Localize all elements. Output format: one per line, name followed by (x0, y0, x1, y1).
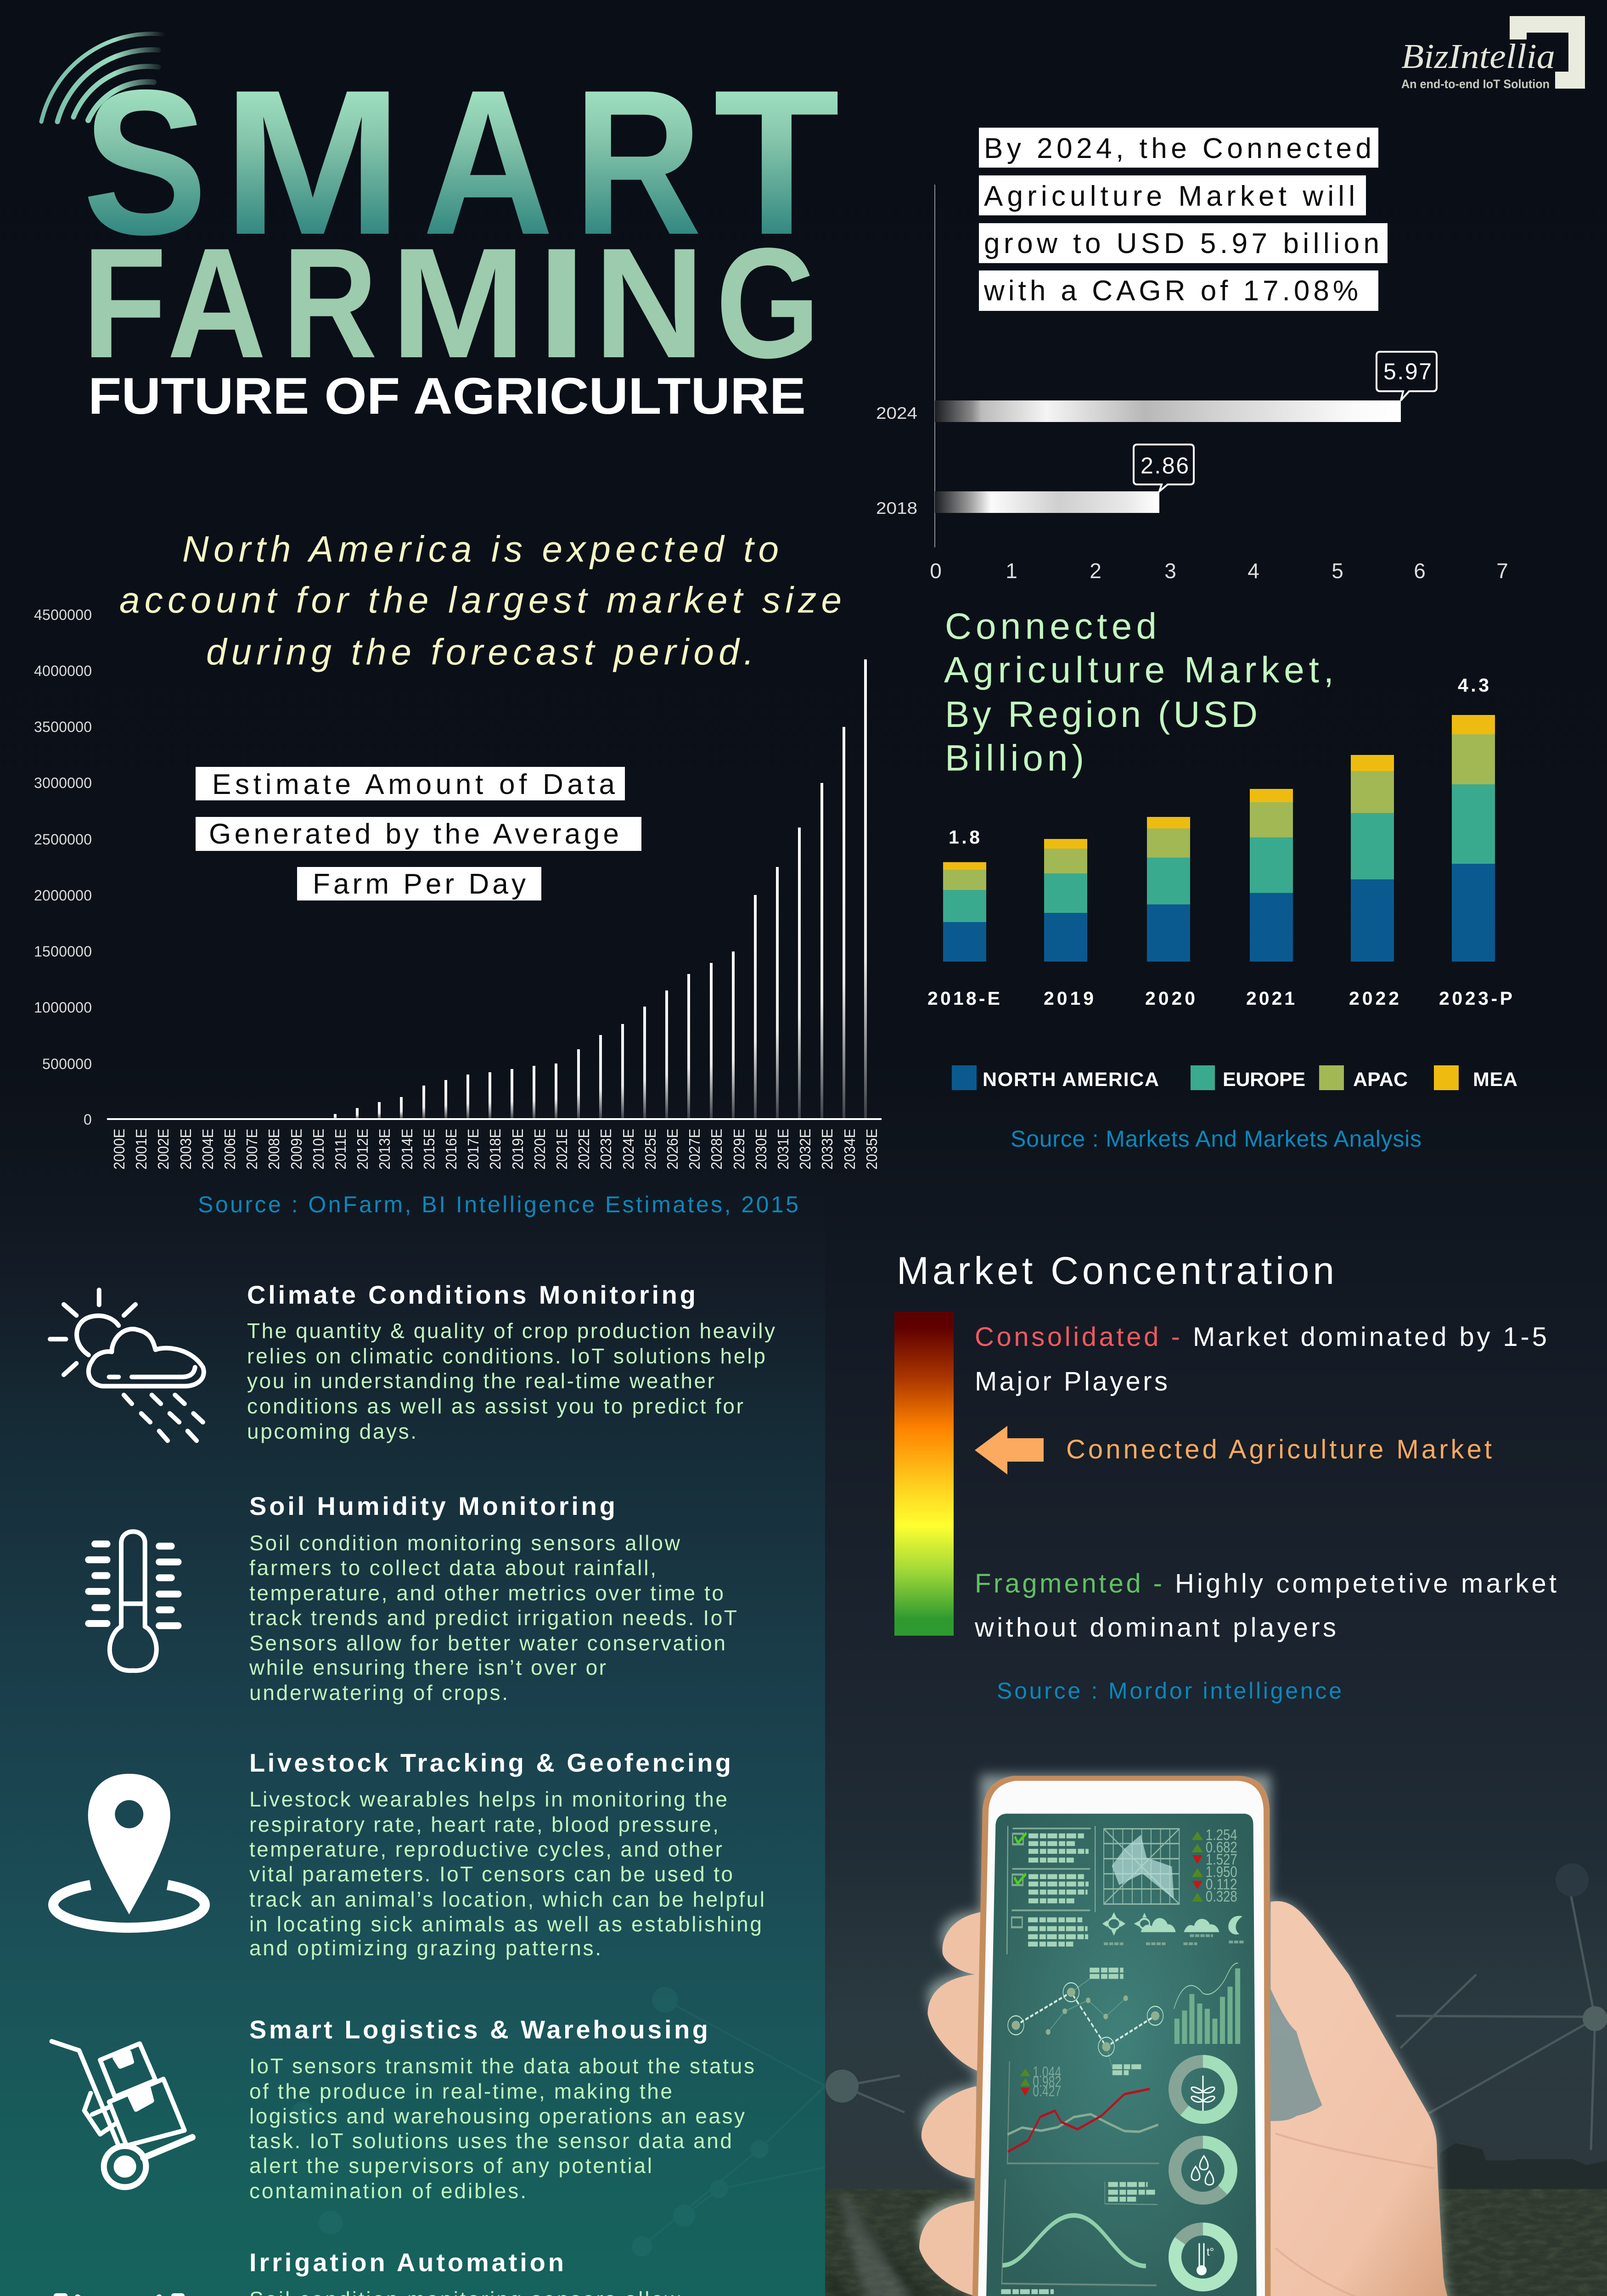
stack 2019 (1044, 839, 1087, 962)
text: soil humidity: underwatering of crops. (249, 1681, 508, 1705)
line chart: 0.982 (1033, 2073, 1061, 2090)
x axis ticks: 7 (1496, 559, 1508, 583)
text: irrigation automation: Irrigation Automation (249, 2248, 564, 2277)
bar chart: market growth (876, 185, 1508, 583)
x axis labels: 2004E (199, 1129, 216, 1170)
x axis labels (111, 1129, 880, 1170)
indicator values: 0.112 (1206, 1875, 1237, 1893)
text: soil humidity: Soil condition monitoring sensors allow (249, 1531, 680, 1555)
x axis ticks: 5 (1332, 559, 1343, 583)
x axis labels: 2029E (730, 1129, 747, 1170)
x axis labels: 2012E (354, 1129, 371, 1170)
x axis labels: 2007E (243, 1129, 260, 1170)
value 4.3: 4.3 (1458, 675, 1489, 696)
text: smart logistics: IoT sensors transmit the data about the status (249, 2054, 754, 2078)
hand glow (919, 1775, 1575, 2296)
x axis ticks: 3 (1164, 559, 1176, 583)
text: smart logistics: alert the supervisors of any potential (249, 2154, 652, 2178)
indicator values: 1.950 (1206, 1863, 1237, 1880)
x axis labels: 2033E (819, 1129, 836, 1170)
x axis labels: 2016E (443, 1129, 460, 1170)
horizon silhouettes (1439, 2143, 1607, 2189)
title: FARMING: M (390, 215, 526, 391)
text: soil humidity: while ensuring there isn’t over or (249, 1655, 606, 1679)
text: climate conditions: conditions as well as assist you to predict for (247, 1394, 743, 1418)
line chart (1007, 2061, 1159, 2163)
x axis labels: 2018E (487, 1129, 504, 1170)
x axis labels: 2035E (863, 1129, 880, 1170)
logo: BizIntellia: BizIntellia (1401, 37, 1555, 76)
mini bar chart (1174, 1963, 1240, 2044)
legend: APAC (1353, 1069, 1408, 1091)
bars (334, 659, 867, 1119)
title: SMART: A (422, 47, 554, 278)
checklist (1007, 1826, 1095, 1954)
logo: BizIntellia: An end-to-end IoT Solution (1401, 77, 1550, 91)
y axis labels: 500000 (42, 1056, 92, 1072)
x axis labels: 2022E (575, 1129, 592, 1170)
indicator values: 1.254 (1206, 1826, 1237, 1843)
x axis ticks: 4 (1247, 559, 1259, 583)
legend (952, 1065, 1517, 1091)
text: soil humidity: farmers to collect data about rainfall, (249, 1556, 656, 1580)
phone body (972, 1776, 1270, 2296)
palm creases (1275, 2133, 1439, 2296)
market concentration descriptions: Highly competetive market (1175, 1569, 1556, 1598)
chart title boxes: Generated by the Average (209, 818, 619, 850)
gradient scale (894, 1311, 954, 1636)
y axis labels (34, 607, 92, 1128)
heading: connected agriculture market by region (944, 606, 1334, 778)
x axis ticks: 1 (1006, 559, 1017, 583)
donut: plant (1175, 2061, 1231, 2117)
icon: hand truck with boxes (52, 2041, 192, 2187)
title: FARMING (82, 215, 820, 391)
bar 2018 (935, 491, 1159, 513)
bar 2024 (935, 400, 1401, 422)
title: FARMING: R (282, 215, 377, 391)
source: OnFarm: Source : OnFarm, BI Intelligence Estimates, 2015 (198, 1192, 798, 1217)
stack 2022 (1351, 755, 1394, 962)
callout: connected agriculture market forecast: Agriculture Market will (984, 180, 1355, 212)
stack 2020 (1147, 817, 1190, 962)
x axis labels: 2020E (531, 1129, 548, 1170)
y axis labels: 1000000 (34, 999, 92, 1016)
y axis labels: 4000000 (34, 663, 92, 679)
callout 2.86: 2.86 (1141, 453, 1189, 478)
indicator values (1192, 1826, 1237, 1905)
title: FARMING: N (594, 215, 705, 391)
y axis labels: 2500000 (34, 831, 92, 848)
text: livestock tracking: Livestock wearables helps in monitoring the (249, 1787, 727, 1811)
title: SMART: S (83, 47, 208, 278)
year labels: 2019 (1044, 988, 1094, 1009)
text: climate conditions (247, 1280, 775, 1443)
network diagram (1008, 1970, 1163, 2073)
market concentration descriptions: Consolidated - (975, 1322, 1180, 1352)
year labels: 2023-P (1439, 988, 1512, 1009)
text: soil humidity: Soil Humidity Monitoring (249, 1491, 615, 1520)
features background panel (0, 1148, 825, 2296)
x axis labels: 2025E (642, 1129, 659, 1170)
market concentration descriptions: Fragmented - (975, 1569, 1162, 1598)
callout: connected agriculture market forecast: grow to USD 5.97 billion (984, 228, 1379, 259)
heading: connected agriculture market by region: Connected (945, 606, 1157, 647)
panel network overlay (292, 1987, 825, 2257)
source: Markets and Markets: Source : Markets And Markets Analysis (1011, 1126, 1422, 1152)
callout 5.97: 5.97 (1383, 359, 1432, 384)
line chart: 0.427 (1033, 2082, 1061, 2099)
indicator values: 1.527 (1206, 1851, 1237, 1868)
callout: connected agriculture market forecast: with a CAGR of 17.08% (983, 275, 1358, 307)
x axis labels: 2010E (310, 1129, 327, 1170)
title: FARMING: I (536, 215, 587, 391)
source: Mordor: Source : Mordor intelligence (997, 1678, 1342, 1704)
x axis labels: 2006E (221, 1129, 238, 1170)
chart title boxes: Farm Per Day (313, 868, 526, 900)
x axis labels: 2030E (753, 1129, 770, 1170)
text: climate conditions: you in understanding the real-time weather (247, 1369, 714, 1393)
y axis labels: 2000000 (34, 887, 92, 904)
callout: connected agriculture market forecast (979, 128, 1388, 311)
x axis ticks: 0 (930, 559, 942, 583)
year labels (927, 988, 1512, 1009)
donut: temperature (1175, 2229, 1231, 2285)
phone screen dashboard (1001, 1826, 1243, 2292)
text: climate conditions: The quantity & quality of crop production heavily (247, 1319, 775, 1343)
x axis ticks (930, 559, 1508, 583)
text: livestock tracking: vital parameters. IoT censors can be used to (249, 1862, 733, 1886)
callout 2.86 (1134, 445, 1194, 491)
text: smart logistics: of the produce in real-time, making the (249, 2079, 672, 2103)
text: soil humidity: temperature, and other metrics over time to (249, 1581, 724, 1605)
text: smart logistics: task. IoT solutions uses the sensor data and (249, 2129, 732, 2153)
x axis labels: 2002E (155, 1129, 172, 1170)
heading: North America: account for the largest market size (119, 580, 842, 620)
x axis ticks: 6 (1414, 559, 1426, 583)
stack 2021 (1250, 789, 1293, 962)
year labels: 2022 (1349, 988, 1399, 1009)
heading: North America: North America is expected to (182, 529, 779, 569)
text: livestock tracking: temperature, reproductive cycles, and other (249, 1837, 722, 1861)
x axis labels: 2000E (111, 1129, 128, 1170)
hand holding phone (919, 1775, 1607, 2296)
icon: thermometer (89, 1531, 178, 1671)
x axis labels: 2032E (797, 1129, 814, 1170)
callout 5.97 (1377, 352, 1437, 400)
market concentration descriptions: Market dominated by 1-5 (1193, 1322, 1547, 1352)
x axis labels: 2008E (265, 1129, 282, 1170)
text: livestock tracking: and optimizing grazing patterns. (249, 1936, 601, 1960)
year labels: 2021 (1246, 988, 1295, 1009)
x axis labels: 2003E (177, 1129, 194, 1170)
bell curve chart (1001, 2179, 1157, 2292)
indicator values: 0.682 (1206, 1839, 1237, 1856)
x axis labels: 2019E (509, 1129, 526, 1170)
x axis labels: 2017E (465, 1129, 482, 1170)
x axis labels: 2001E (133, 1129, 150, 1170)
stacked bar chart: by region (927, 675, 1512, 1009)
title: SMART: R (573, 47, 702, 278)
year label 2018: 2018 (876, 499, 917, 518)
chart: data generated per farm (34, 607, 882, 1170)
text: smart logistics (249, 2015, 754, 2203)
title: SMART: T (714, 47, 840, 278)
x axis labels: 2023E (597, 1129, 614, 1170)
x axis ticks: 2 (1090, 559, 1101, 583)
field photo (0, 2189, 1607, 2296)
icon: location pin (53, 1774, 205, 1928)
text: soil humidity (249, 1491, 737, 1705)
legend: EUROPE (1223, 1069, 1305, 1091)
heading: North America (119, 529, 842, 672)
title: FARMING: G (716, 215, 820, 391)
icon: weather (50, 1290, 204, 1441)
network lines (826, 1863, 1607, 2150)
text: smart logistics: logistics and warehousing operations an easy (249, 2104, 745, 2128)
x axis labels: 2009E (288, 1129, 305, 1170)
callout: connected agriculture market forecast: By 2024, the Connected (984, 133, 1371, 164)
stack 2018-E (943, 862, 986, 962)
text: livestock tracking: respiratory rate, heart rate, blood pressure, (249, 1812, 719, 1836)
x axis labels: 2024E (620, 1129, 637, 1170)
weather icons (1102, 1912, 1243, 1944)
title: FARMING: F (82, 215, 167, 391)
year labels: 2020 (1145, 988, 1195, 1009)
stack 2023-P (1452, 715, 1495, 962)
year labels: 2018-E (927, 988, 1000, 1009)
x axis labels: 2034E (841, 1129, 858, 1170)
x axis labels: 2013E (376, 1129, 393, 1170)
text: livestock tracking: Livestock Tracking & Geofencing (249, 1748, 731, 1777)
text: climate conditions: Climate Conditions Monitoring (247, 1280, 696, 1309)
text: climate conditions: relies on climatic conditions. IoT solutions help (247, 1344, 765, 1368)
x axis labels: 2014E (399, 1129, 416, 1170)
text: smart logistics: Smart Logistics & Warehousing (249, 2015, 708, 2044)
year label 2024: 2024 (876, 404, 917, 422)
x axis labels: 2031E (775, 1129, 792, 1170)
chart title boxes: Estimate Amount of Data (212, 769, 615, 800)
y axis labels: 0 (84, 1111, 92, 1128)
hand (1041, 1901, 1607, 2296)
y axis labels: 3000000 (34, 775, 92, 791)
arrow (975, 1426, 1044, 1474)
heading: connected agriculture market by region: Billion) (945, 737, 1084, 778)
value 1.8: 1.8 (949, 827, 980, 848)
text: soil humidity: Sensors allow for better water conservation (249, 1631, 725, 1655)
indicator values: 0.328 (1206, 1888, 1237, 1905)
heading: connected agriculture market by region: By Region (USD (945, 694, 1258, 735)
text: irrigation automation (249, 2248, 755, 2296)
chart title boxes (196, 767, 641, 900)
market concentration descriptions: Major Players (975, 1367, 1168, 1396)
legend: MEA (1473, 1069, 1517, 1091)
phone screen (986, 1814, 1257, 2296)
x axis labels: 2021E (553, 1129, 570, 1170)
x axis labels: 2026E (664, 1129, 681, 1170)
y axis labels: 1500000 (34, 943, 92, 960)
heading: North America: during the forecast period. (206, 631, 754, 672)
market concentration descriptions (974, 1322, 1556, 1643)
heading: market concentration: Market Concentration (897, 1249, 1334, 1292)
wifi arcs (41, 34, 164, 122)
title: SMART (83, 47, 840, 278)
subtitle: FUTURE OF AGRICULTURE (88, 367, 806, 425)
text: livestock tracking: track an animal’s location, which can be helpful (249, 1887, 764, 1911)
market concentration descriptions: without dominant players (974, 1613, 1336, 1643)
text: livestock tracking (249, 1748, 764, 1960)
donut: water (1175, 2142, 1231, 2198)
radar chart (1104, 1829, 1179, 1904)
connected agriculture market label: Connected Agriculture Market (1066, 1435, 1492, 1464)
title: SMART: M (222, 47, 403, 278)
legend: NORTH AMERICA (983, 1069, 1159, 1091)
text: smart logistics: contamination of edibles. (249, 2179, 526, 2203)
line chart: 1.044 (1033, 2063, 1061, 2081)
fingers (919, 1912, 983, 2295)
title: FARMING: A (167, 215, 266, 391)
x axis labels: 2027E (686, 1129, 703, 1170)
text: soil humidity: track trends and predict irrigation needs. IoT (249, 1606, 737, 1630)
text: climate conditions: upcoming days. (247, 1419, 416, 1443)
y axis labels: 3500000 (34, 719, 92, 735)
heading: connected agriculture market by region: Agriculture Market, (944, 649, 1334, 690)
x axis labels: 2015E (421, 1129, 438, 1170)
x axis labels: 2011E (332, 1129, 349, 1170)
y axis labels: 4500000 (34, 607, 92, 623)
x axis labels: 2028E (708, 1129, 725, 1170)
logo: BizIntellia (1401, 16, 1585, 91)
donut: temperature: t° (1207, 2246, 1214, 2258)
donut gauges (1175, 2061, 1231, 2285)
text: livestock tracking: in locating sick animals as well as establishing (249, 1912, 762, 1936)
